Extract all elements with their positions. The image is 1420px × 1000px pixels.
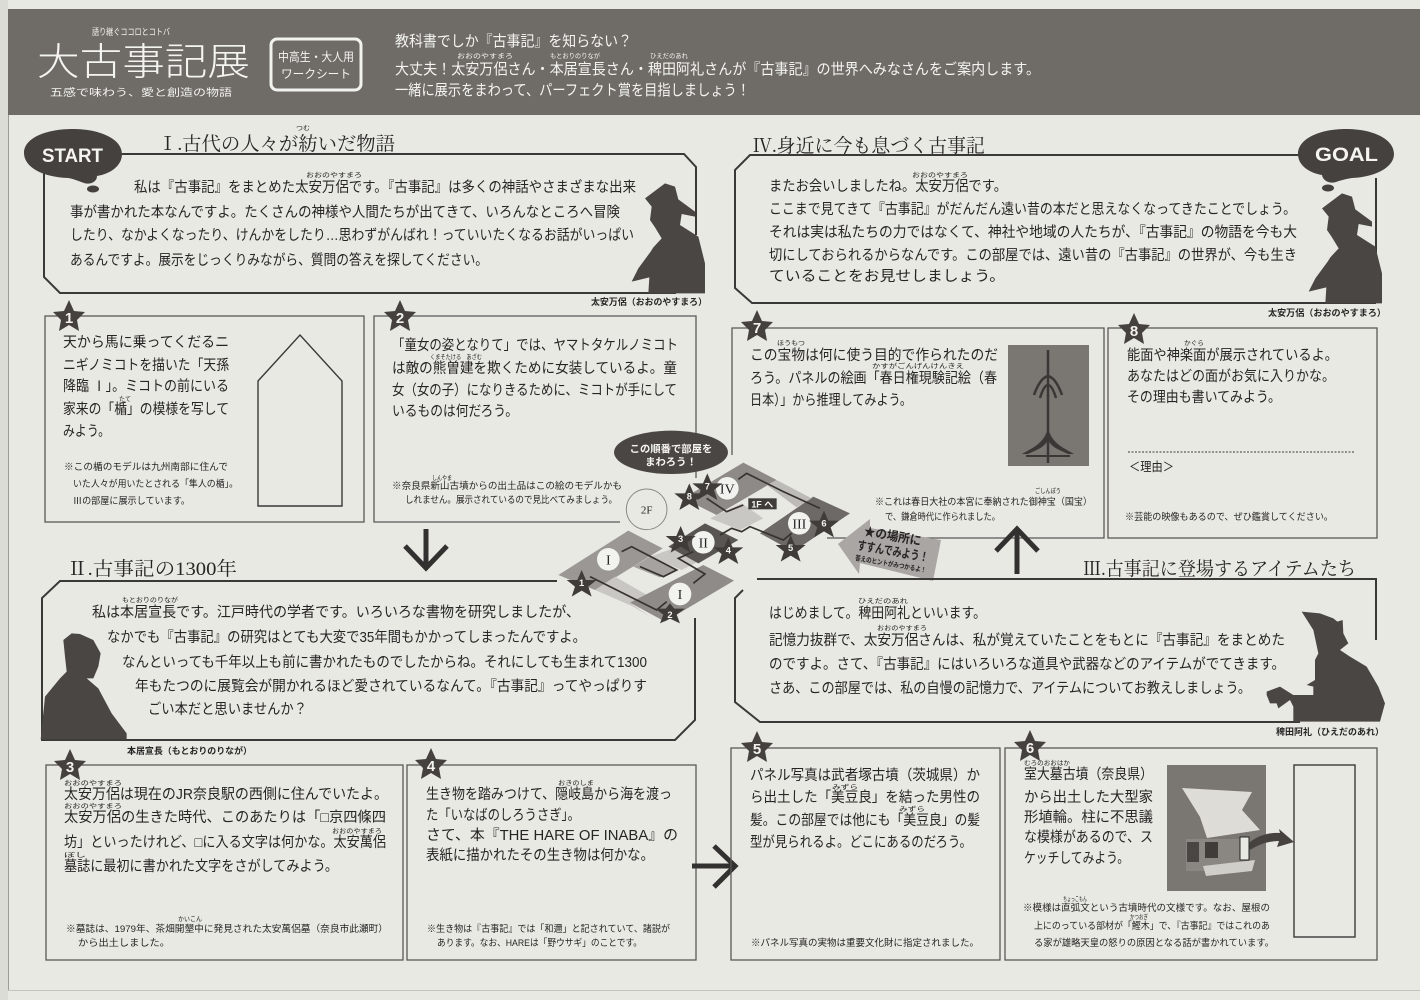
question 1 note: Ⅲの部屋に展示しています。 xyxy=(73,496,190,507)
star badge 4: 4 xyxy=(427,758,436,775)
route instruction bubble xyxy=(614,431,728,474)
section II narration: ごい本だと思いませんか？ xyxy=(148,701,307,718)
question 2 text: 女（女の子）になりきるために、ミコトが手にして xyxy=(392,382,677,399)
header introduction text: 教科書でしか『古事記』を知らない？ xyxy=(395,33,632,50)
question 1 note: ※この楯のモデルは九州南部に住んで xyxy=(64,461,228,473)
section IV speech panel xyxy=(735,155,1386,318)
section I narration: 私は『古事記』をまとめた太安万侶です。『古事記』は多くの神話やさまざまな出来 xyxy=(134,178,636,196)
question 3 note xyxy=(66,915,388,949)
question 8 box xyxy=(1108,313,1377,538)
header introduction text: もとおりのりなが xyxy=(550,51,600,60)
map star numbers xyxy=(579,481,827,620)
question 2 note xyxy=(392,474,622,506)
section II narration: なんといっても千年以上も前に書かれたものでしたからね。それにしても生まれて1300 xyxy=(122,654,647,671)
down arrow xyxy=(405,529,447,568)
map star numbers: 4 xyxy=(726,545,732,555)
question 8 text xyxy=(1127,339,1338,406)
section I heading: Ⅰ.古代の人々が紡いだ物語 xyxy=(158,133,395,155)
room labels: I xyxy=(678,588,683,603)
question 3 text: おおのやすまろ xyxy=(64,779,122,787)
room labels: III xyxy=(792,517,807,532)
header introduction text: 大丈夫！太安万侶さん・本居宣長さん・稗田阿礼さんが『古事記』の世界へみなさんをご案内します。 xyxy=(395,61,1040,78)
question 3 box xyxy=(46,749,403,960)
star badge 5 xyxy=(741,731,773,762)
question 5 text: みずら xyxy=(899,804,925,813)
section III narration: 記憶力抜群で、太安万侶さんは、私が覚えていたことをもとに『古事記』をまとめた xyxy=(769,632,1285,649)
2F circle xyxy=(626,489,667,530)
curved pointer arrow xyxy=(1249,829,1294,850)
section II narration: 私は本居宣長です。江戸時代の学者です。いろいろな書物を研究しましたが、 xyxy=(92,604,580,621)
question 5 box xyxy=(731,731,1000,960)
question 2 box xyxy=(374,300,696,522)
star badge 7 xyxy=(741,310,773,341)
question 5 text xyxy=(750,767,980,851)
section I heading xyxy=(158,124,395,155)
question 1 box xyxy=(45,300,364,522)
question 3 note: かいこん xyxy=(178,915,202,923)
question 1 text: 降臨 Ⅰ」。ミコトの前にいる xyxy=(63,378,229,395)
floor map xyxy=(558,431,850,623)
question 1 text: みよう。 xyxy=(63,424,110,440)
section IV heading: Ⅳ.身近に今も息づく古事記 xyxy=(753,135,985,157)
question 3 text: ぼし xyxy=(64,851,86,859)
question 2 text: くまそたける あざむ xyxy=(430,352,482,361)
section IV narration: おおのやすまろ xyxy=(912,171,968,179)
map star numbers: 6 xyxy=(821,519,827,529)
section III narration: のですよ。さて、『古事記』にはいろいろな道具や武器などのアイテムがでてきます。 xyxy=(769,656,1285,673)
question 2 text: は敵の熊曽建を欺くために女装しているよ。童 xyxy=(392,360,677,377)
question 5 text: 髪。この部屋では他にも「美豆良」の髪 xyxy=(750,812,980,829)
question 2 text xyxy=(392,337,678,420)
map stars xyxy=(567,473,839,623)
question 5 text: 型が見られるよ。どこにあるのだろう。 xyxy=(750,834,972,851)
section I narration: あるんですよ。展示をじっくりみながら、質問の答えを探してください。 xyxy=(70,251,488,269)
map star numbers: 7 xyxy=(705,481,710,491)
header introduction text: 一緒に展示をまわって、パーフェクト賞を目指しましょう！ xyxy=(395,82,750,99)
question 1 note xyxy=(64,461,238,507)
room labels: II xyxy=(699,536,708,551)
map star numbers: 8 xyxy=(687,491,692,501)
question 1 text: たて xyxy=(119,395,131,403)
question 4 text: た「いなばのしろうさぎ」。 xyxy=(426,807,580,824)
shield drawing area xyxy=(258,335,342,506)
question 3 text xyxy=(64,779,388,875)
question 8 note: ※芸能の映像もあるので、ぜひ鑑賞してください。 xyxy=(1125,511,1333,523)
sketch box xyxy=(1294,765,1355,937)
route instruction bubble: この順番で部屋を xyxy=(630,443,712,456)
question 2 text: 「童女の姿となりて」では、ヤマトタケルノミコト xyxy=(392,337,678,354)
section I speech panel xyxy=(44,154,707,307)
question 6 text: むろのおおはか xyxy=(1024,759,1071,767)
1F sign: 1F へ xyxy=(751,499,773,509)
question 7 note: ※これは春日大社の本宮に奉納された御神宝（国宝） xyxy=(875,496,1092,508)
silhouette: Motoori xyxy=(41,633,127,739)
question 1 text: 家来の「楯」の模様を写して xyxy=(63,401,229,418)
question 6 note: かつおぎ xyxy=(1130,912,1148,921)
route lines xyxy=(590,473,820,610)
question 6 text: な模様があるので、ス xyxy=(1024,829,1153,846)
question 3 text: 墓誌に最初に書かれた文字をさがしてみよう。 xyxy=(64,858,338,875)
section I narration xyxy=(70,171,636,269)
exhibition tagline: 語り継ぐココロとコトバ xyxy=(92,26,170,37)
section IV narration: またお会いしましたね。太安万侶です。 xyxy=(769,178,1007,195)
section I narration: 事が書かれた本なんですよ。たくさんの神様や人間たちが出てきて、いろんなところへ冒険 xyxy=(70,204,620,221)
map star numbers: 3 xyxy=(678,534,683,544)
callout arrow: stand here: ★の場所に xyxy=(863,523,922,548)
section IV narration: 切にしておられるからなんです。この部屋では、遠い昔の『古事記』の世界が、今も生き xyxy=(769,247,1297,264)
silhouette: Hieda no Are xyxy=(1267,612,1385,722)
name label: Motoori: 本居宣長（もとおりのりなが） xyxy=(127,745,252,756)
star badge 1: 1 xyxy=(65,310,73,327)
section I narration: したり、なかよくなったり、けんかをしたり…思わずがんばれ！っていいたくなるお話がいっぱい xyxy=(70,227,634,244)
question 2 note: しれません。展示されているので見比べてみましょう。 xyxy=(405,494,617,506)
map rooms xyxy=(558,463,850,622)
exhibition subtitle: 五感で味わう、愛と創造の物語 xyxy=(50,86,232,99)
section II narration: なかでも『古事記』の研究はとても大変で35年間もかかってしまったんですよ。 xyxy=(107,629,586,646)
question 3 text: おおのやすまろ xyxy=(332,827,382,835)
header introduction text xyxy=(395,33,1040,99)
name label: Hieda no Are: 稗田阿礼（ひえだのあれ） xyxy=(1276,726,1384,737)
question 7 text: 日本）」から推理してみよう。 xyxy=(750,392,912,409)
question 7 note xyxy=(875,486,1092,523)
up arrow xyxy=(996,529,1038,574)
question 6 note: ※模様は直弧文という古墳時代の文様です。なお、屋根の xyxy=(1023,902,1270,914)
question 1 text: ニギノミコトを描いた「天孫 xyxy=(63,357,229,374)
worksheet tag: ワークシート xyxy=(281,67,351,81)
question 4 note: ※生き物は『古事記』では「和邇」と記されていて、諸説が xyxy=(427,923,670,935)
star badge 5: 5 xyxy=(753,741,761,758)
worksheet tag: 中高生・大人用 xyxy=(278,49,354,64)
map star numbers: 5 xyxy=(788,543,793,553)
star badge 8 xyxy=(1118,313,1150,344)
silhouette: Yasumaro xyxy=(632,183,705,293)
START bubble: START xyxy=(42,146,103,167)
question 7 text xyxy=(750,339,998,409)
section I narration: おおのやすまろ xyxy=(306,171,362,179)
question 7 note: で、鎌倉時代に作られました。 xyxy=(885,511,1000,523)
question 7 text: ほうもつ xyxy=(777,339,805,347)
question 4 note xyxy=(427,923,670,949)
question 6 note: ちょっこもん xyxy=(1063,895,1087,903)
section II heading: Ⅱ.古事記の1300年 xyxy=(67,558,237,580)
star badge 2 xyxy=(384,300,416,331)
question 4 text xyxy=(426,779,678,864)
star badge 6: 6 xyxy=(1026,740,1034,757)
question 6 text: 室大墓古墳（奈良県） xyxy=(1024,766,1153,783)
question 6 box xyxy=(1005,730,1377,960)
photo: house haniwa xyxy=(1167,765,1266,891)
star badge 8: 8 xyxy=(1130,323,1138,340)
header banner xyxy=(8,9,1420,115)
question 6 text: 形埴輪。柱に不思議 xyxy=(1024,808,1153,826)
section II speech panel xyxy=(41,581,695,756)
question 2 note: しんやま xyxy=(432,474,452,482)
question 8 text: 能面や神楽面が展示されているよ。 xyxy=(1127,347,1338,364)
name label: Yasumaro: 太安万侶（おおのやすまろ） xyxy=(1268,307,1386,318)
GOAL bubble xyxy=(1298,129,1394,192)
exhibition title: 大古事記展 xyxy=(37,42,250,84)
question 6 note: る家が雄略天皇の怒りの原因となる話が書かれています。 xyxy=(1034,937,1274,949)
question 7 text: ろう。パネルの絵画「春日権現験記絵（春 xyxy=(750,370,997,387)
room labels: IV xyxy=(720,482,735,497)
callout arrow: stand here: 答えのヒントがみつかるよ！ xyxy=(854,553,927,575)
question 1 text xyxy=(63,334,229,440)
detail box on haniwa xyxy=(1240,837,1249,860)
photo: sacred treasure xyxy=(1008,345,1089,466)
star badge 6 xyxy=(1014,730,1046,761)
answer line xyxy=(1128,451,1355,453)
star badge 4 xyxy=(415,748,447,779)
header introduction text: おおのやすまろ xyxy=(457,52,513,60)
2F circle: 2F xyxy=(641,504,652,516)
section III narration: さあ、この部屋では、私の自慢の記憶力で、アイテムについてお教えしましょう。 xyxy=(769,680,1251,697)
section IV narration: それは実は私たちの力ではなくて、神社や地域の人たちが、『古事記』の物語を今も大 xyxy=(769,224,1297,241)
GOAL bubble: GOAL xyxy=(1315,145,1378,166)
star badge 2: 2 xyxy=(396,310,404,327)
section II narration xyxy=(92,595,647,718)
star badge 7: 7 xyxy=(753,320,761,337)
section III narration: ひえだのあれ xyxy=(858,597,909,605)
question 3 text: おおのやすまろ xyxy=(64,802,122,810)
question 8 text: その理由も書いてみよう。 xyxy=(1127,389,1281,406)
question 7 note: ごしんぽう xyxy=(1035,486,1061,495)
section III narration: はじめまして。稗田阿礼といいます。 xyxy=(769,605,986,622)
section IV narration xyxy=(769,171,1297,285)
room labels xyxy=(597,477,811,605)
right arrow xyxy=(692,846,735,887)
room labels: I xyxy=(606,553,611,568)
question 1 note: いた人々が用いたとされる「隼人の楯」。 xyxy=(73,478,238,490)
question 6 text xyxy=(1024,759,1153,867)
START bubble xyxy=(24,129,122,192)
question 6 note: 上にのっている部材が「鰹木」で、『古事記』ではこれのあ xyxy=(1034,920,1270,932)
section III narration xyxy=(769,597,1285,697)
star badge 1 xyxy=(53,300,85,331)
map star numbers: 2 xyxy=(667,610,673,620)
star badge 3: 3 xyxy=(66,759,74,776)
question 5 note: ※パネル写真の実物は重要文化財に指定されました。 xyxy=(751,937,979,949)
section II narration: 年もたつのに展覧会が開かれるほど愛されているなんて。『古事記』ってやっぱりす xyxy=(135,678,647,695)
section IV narration: ここまで見てきて『古事記』がだんだん遠い昔の本だと思えなくなってきたことでしょう。 xyxy=(769,201,1296,218)
question 4 text: 表紙に描かれたその生き物は何かな。 xyxy=(426,847,654,864)
question 3 text: 坊」といったけれど、□に入る文字は何かな。太安萬侶 xyxy=(64,834,386,851)
question 4 text: おきのしま xyxy=(558,779,594,787)
question 2 text: いるものは何だろう。 xyxy=(392,403,518,420)
name label: Yasumaro: 太安万侶（おおのやすまろ） xyxy=(591,296,707,307)
question 3 note: から出土しました。 xyxy=(78,937,170,949)
section III heading: Ⅲ.古事記に登場するアイテムたち xyxy=(1083,558,1356,580)
question 6 text: ケッチしてみよう。 xyxy=(1024,850,1129,867)
question 1 text: 天から馬に乗ってくだるニ xyxy=(63,334,229,351)
map star numbers: 1 xyxy=(579,578,584,588)
question 3 text: 太安万侶の生きた時代、このあたりは「□京四條四 xyxy=(64,809,386,826)
question 5 text: みずら xyxy=(832,782,858,791)
question 6 note xyxy=(1023,895,1274,949)
question 4 text: 生き物を踏みつけて、隠岐島から海を渡っ xyxy=(426,786,672,803)
question 4 note: あります。なお、HAREは「野ウサギ」のことです。 xyxy=(437,938,642,949)
question 2 note: ※奈良県新山古墳からの出土品はこの絵のモデルかも xyxy=(392,480,622,492)
section III narration: おおのやすまろ xyxy=(877,624,927,632)
question 4 text: さて、本『THE HARE OF INABA』の xyxy=(426,827,678,844)
question 3 text: 太安万侶は現在のJR奈良駅の西側に住んでいたよ。 xyxy=(64,786,388,803)
question 5 text: ら出土した「美豆良」を結った男性の xyxy=(750,789,980,806)
header introduction text: ひえだのあれ xyxy=(650,52,688,60)
section IV narration: ていることをお見せしましょう。 xyxy=(769,268,1005,285)
star badge 3 xyxy=(54,749,86,780)
question 8 text: あなたはどの面がお気に入りかな。 xyxy=(1127,368,1335,385)
section III speech panel xyxy=(735,579,1385,737)
question 8 text: かぐら xyxy=(1184,339,1204,347)
section II narration: もとおりのりなが xyxy=(122,595,179,604)
question 6 text: から出土した大型家 xyxy=(1024,789,1153,806)
callout arrow: stand here: すすんでみよう！ xyxy=(856,538,930,565)
route instruction bubble: まわろう！ xyxy=(645,456,697,468)
question 5 text: パネル写真は武者塚古墳（茨城県）か xyxy=(750,767,980,784)
question 4 box xyxy=(407,748,696,960)
silhouette: Yasumaro xyxy=(1309,193,1382,303)
reason label: ＜理由＞ xyxy=(1129,460,1174,474)
worksheet tag xyxy=(271,39,361,90)
question 7 text: かすがごんげんけんきえ xyxy=(872,361,964,370)
question 7 box xyxy=(732,310,1104,538)
question 3 note: ※墓誌は、1979年、茶畑開墾中に発見された太安萬侶墓（奈良市此瀬町） xyxy=(66,923,388,935)
question 7 text: この宝物は何に使う目的で作られたのだ xyxy=(750,347,998,364)
section I heading: つむ xyxy=(296,124,310,132)
callout arrow: stand here xyxy=(838,519,941,581)
